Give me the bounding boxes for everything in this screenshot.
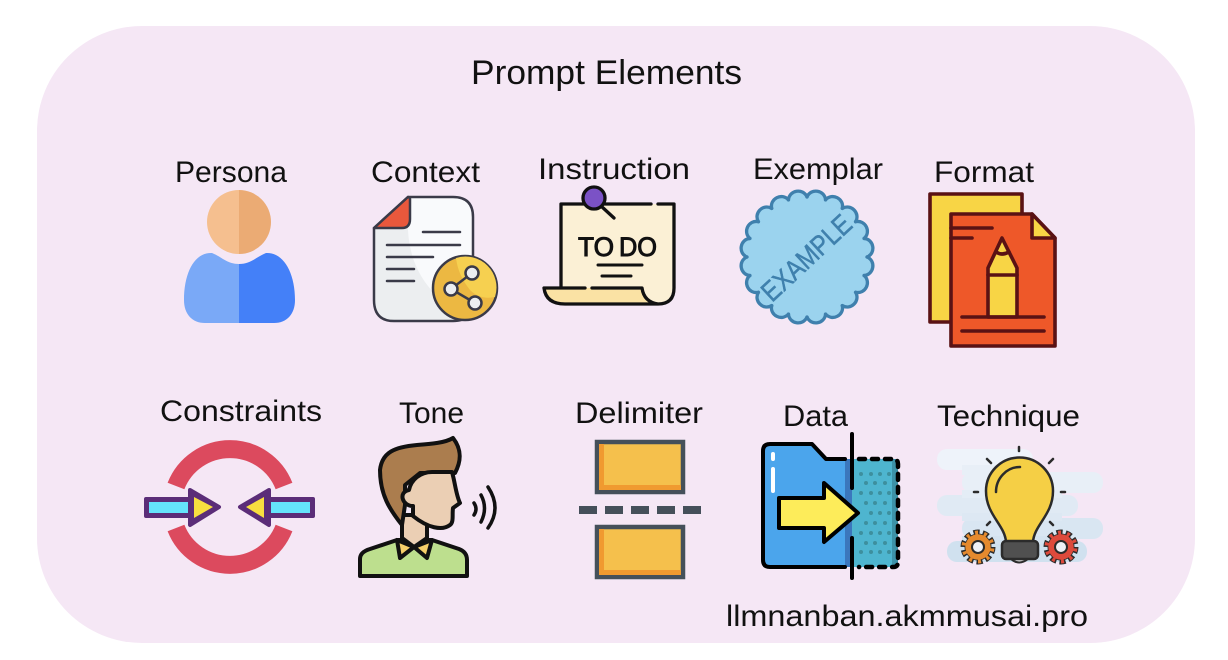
- element: Delimiter: [575, 397, 703, 577]
- icon: light bulb with gears: [937, 447, 1103, 562]
- heading: Format: Format: [934, 156, 1035, 189]
- heading: Data: Data: [783, 400, 848, 433]
- element: Exemplar: [731, 153, 883, 333]
- element: Tone: [360, 397, 495, 576]
- footer URL: llmnanban.akmmusai.pro: [726, 600, 1088, 633]
- icon: document with share badge: [374, 197, 497, 321]
- heading: Delimiter: Delimiter: [575, 397, 703, 430]
- icon: to do note: DO: [619, 232, 657, 262]
- heading: Tone: Tone: [399, 397, 464, 430]
- element: Context: [371, 156, 497, 321]
- element: Format: [930, 156, 1055, 346]
- icon: example stamp: EXAMPLE: [755, 208, 858, 307]
- element: Technique: [937, 400, 1103, 562]
- element: Instruction: [538, 153, 690, 304]
- icon: folder with arrow: [763, 434, 898, 578]
- icon: speaking man: [360, 438, 495, 576]
- icon: person: [184, 190, 295, 323]
- heading: Instruction: Instruction: [538, 153, 690, 186]
- heading: Exemplar: Exemplar: [753, 153, 883, 186]
- icon: converging arrows in ring: [146, 449, 313, 565]
- title: Prompt Elements: [471, 54, 742, 92]
- icon: two blocks with dashed line: [579, 442, 701, 577]
- icon: orange gear: [964, 532, 992, 562]
- icon: example stamp: [731, 181, 883, 333]
- icon: red gear: [1046, 532, 1076, 562]
- element: Constraints: [146, 395, 322, 565]
- heading: Persona: Persona: [175, 156, 287, 189]
- heading: Technique: Technique: [937, 400, 1080, 433]
- heading: Constraints: Constraints: [160, 395, 322, 428]
- element: Data: [763, 400, 898, 578]
- icon: to do note: [544, 187, 674, 304]
- icon: to do note: TO: [578, 232, 614, 262]
- element: Persona: [175, 156, 295, 323]
- heading: Context: Context: [371, 156, 481, 189]
- icon: pages with pencil: [930, 194, 1055, 346]
